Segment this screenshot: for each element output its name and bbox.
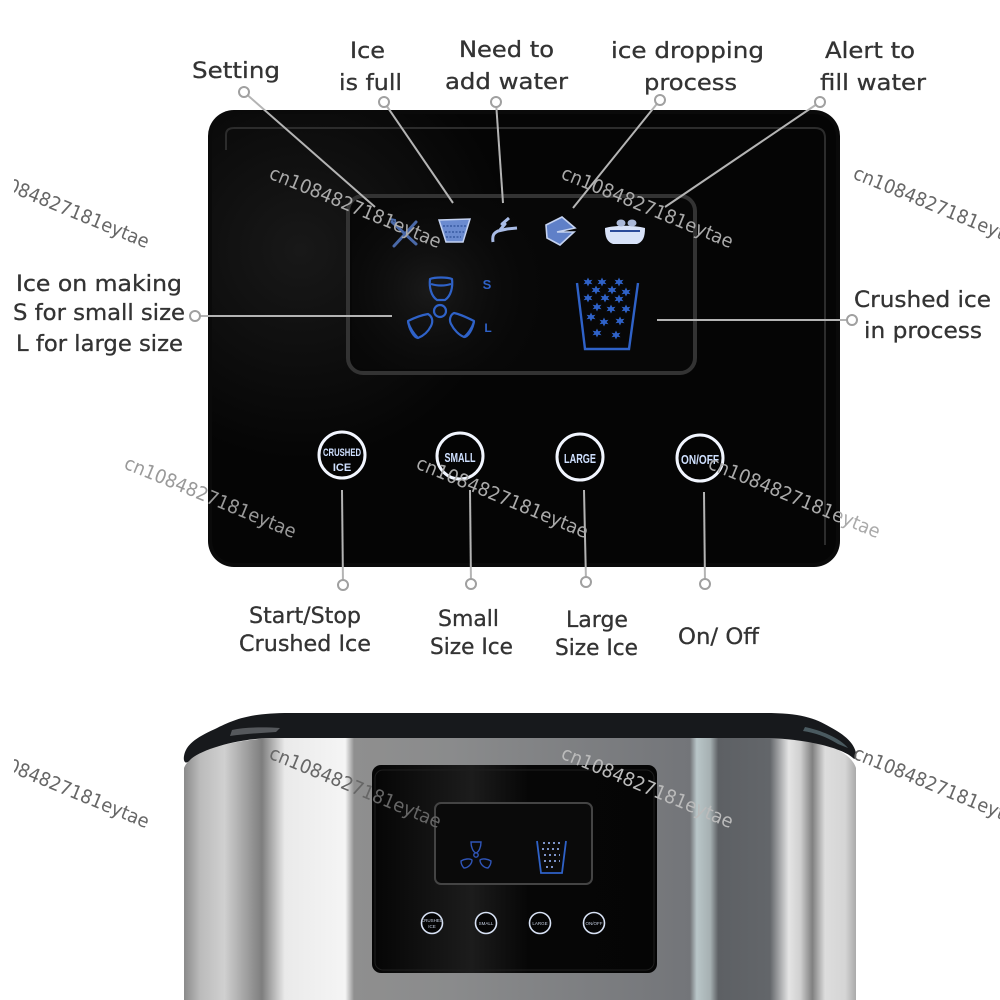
- machine body: [184, 738, 856, 1000]
- control panel close-up: [208, 110, 840, 567]
- watermarks: cn1084827181eytae: [266, 162, 444, 253]
- label: on off: On/ Off: [678, 625, 760, 650]
- label: need to add water: [445, 38, 569, 95]
- mini trefoil icon: [461, 842, 491, 868]
- label: ice on making: L for large size: [16, 332, 183, 357]
- label: ice dropping process: process: [644, 71, 737, 96]
- label: start/stop crushed ice: [239, 604, 371, 657]
- button: small: SMALL: [444, 450, 476, 465]
- L indicator: L: [484, 321, 492, 335]
- label: crushed ice in process: in process: [864, 319, 982, 344]
- mini display: [435, 803, 592, 884]
- icon: setting wrench: [390, 219, 416, 246]
- label: alert to fill water: fill water: [820, 71, 927, 96]
- label: large size ice: Large: [566, 608, 628, 633]
- label: ice on making: Ice on making: [16, 272, 182, 297]
- ice machine photo: [184, 713, 856, 1000]
- label: need to add water: add water: [445, 70, 569, 95]
- icon: ice dropping: [546, 217, 575, 245]
- machine control panel: [372, 765, 657, 973]
- watermarks: cn1084827181eytae: [266, 742, 444, 833]
- label: start/stop crushed ice: Start/Stop: [249, 604, 361, 629]
- label: small size ice: Small: [438, 607, 499, 632]
- mini buttons: [422, 912, 604, 934]
- button: small: [437, 433, 483, 479]
- icon: ice full bucket: [439, 219, 470, 242]
- button: crushed ice: ICE: [333, 462, 351, 474]
- mini button text: LARGE: [532, 921, 548, 926]
- icon: ice making trefoil: [408, 278, 474, 338]
- label: crushed ice in process: [854, 288, 991, 344]
- label: need to add water: Need to: [459, 38, 554, 63]
- label: large size ice: Size Ice: [555, 636, 638, 661]
- mini button text: ON/OFF: [586, 921, 603, 926]
- icon: water tap: [493, 218, 517, 242]
- label: ice is full: [339, 39, 402, 96]
- label: ice is full: is full: [339, 71, 402, 96]
- watermarks: cn1084827181eytae: [413, 452, 591, 543]
- watermarks: cn1084827181eytae: [705, 452, 883, 543]
- label: start/stop crushed ice: Crushed Ice: [239, 632, 371, 657]
- display window: [348, 196, 695, 373]
- label: ice is full: Ice: [350, 39, 385, 64]
- callout leader lines: [190, 87, 857, 590]
- mini button text: ICE: [428, 924, 436, 929]
- machine lid: [184, 713, 856, 763]
- label: ice on making: [13, 272, 185, 357]
- watermarks: cn1084827181eytae: [558, 162, 736, 253]
- mini button text: [421, 918, 603, 929]
- label: ice on making: S for small size: [13, 301, 185, 326]
- icon: crushed ice glass: [577, 278, 638, 349]
- mini button text: CRUSHED: [421, 918, 444, 923]
- label: alert to fill water: Alert to: [825, 39, 915, 64]
- icon: fill water alert: [605, 220, 645, 244]
- label: small size ice: Size Ice: [430, 635, 513, 660]
- watermarks: cn1084827181eytae: [558, 742, 736, 833]
- label: small size ice: [430, 607, 513, 660]
- button: crushed ice: [319, 432, 365, 478]
- label: alert to fill water: [820, 39, 927, 96]
- label: ice dropping process: ice dropping: [611, 39, 764, 64]
- button: large: [557, 434, 603, 480]
- button: crushed ice: CRUSHED: [323, 447, 361, 459]
- button: on/off: ON/OFF: [681, 452, 719, 467]
- mini button text: SMALL: [479, 921, 494, 926]
- label: ice dropping process: [611, 39, 764, 96]
- S indicator: S: [483, 277, 492, 292]
- label: crushed ice in process: Crushed ice: [854, 288, 991, 313]
- label: setting: Setting: [192, 59, 280, 84]
- watermarks: cn1084827181eytae: [121, 452, 299, 543]
- button: on/off: [677, 435, 723, 481]
- mini glass icon: [537, 841, 566, 873]
- label: large size ice: [555, 608, 638, 661]
- watermarks: [0, 162, 1000, 833]
- button: large: LARGE: [564, 451, 596, 466]
